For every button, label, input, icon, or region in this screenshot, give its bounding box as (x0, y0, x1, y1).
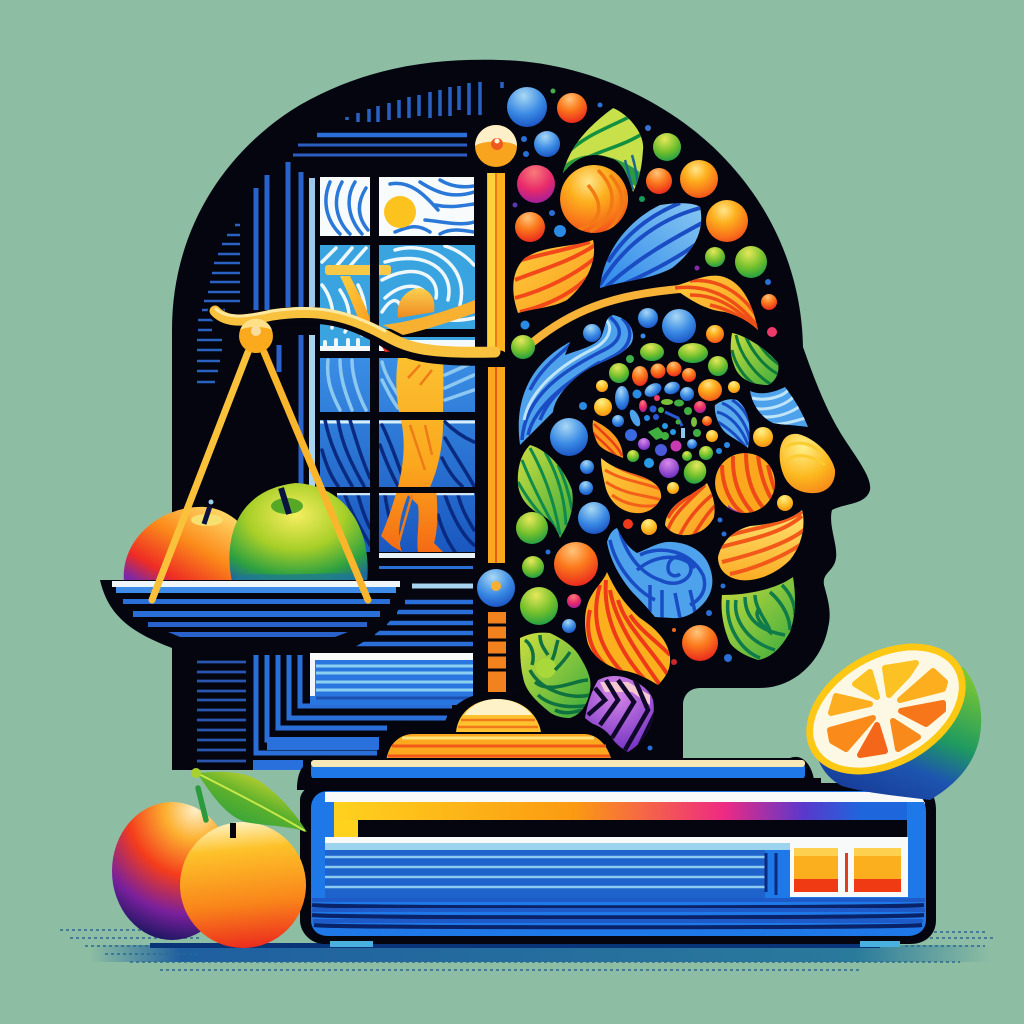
citrus half (783, 617, 989, 801)
big orange leaf lower (718, 510, 804, 580)
panel: window with swirling sky (320, 177, 475, 569)
leaves and fruit shapes inside head (505, 100, 835, 755)
figure other arm (383, 300, 475, 335)
purple shell (585, 676, 654, 752)
scale pan (100, 580, 410, 648)
citrus segments (830, 663, 945, 755)
scale post (474, 125, 518, 698)
window lower rows: deep blue waves (320, 358, 475, 552)
green swirl ball (520, 632, 590, 718)
citrus skin (817, 667, 981, 800)
window row one: white sky (320, 177, 475, 236)
blue leaf top (600, 203, 702, 288)
lower light block (310, 653, 473, 705)
blue swirl blob (607, 528, 712, 618)
citrus pith (793, 626, 979, 792)
middle knob (474, 566, 518, 610)
yellow fruit (780, 434, 835, 493)
spiral of dots (579, 343, 740, 494)
ground shadow (60, 930, 995, 970)
green leaf bottom right (722, 577, 795, 660)
scale strings (152, 352, 368, 600)
figure head (398, 288, 434, 318)
left dashes (197, 225, 240, 382)
scale base dome (376, 692, 622, 762)
orange leaf small (592, 420, 623, 458)
orange leaf left (513, 240, 594, 313)
top green leaf (563, 108, 644, 192)
sun (384, 196, 416, 228)
fruit: orange (180, 822, 306, 948)
orange leaf centre (665, 483, 715, 536)
figure in window (325, 265, 475, 552)
orange leaf centre left (601, 458, 662, 514)
left beam (215, 311, 495, 352)
panel: lower block line work (197, 586, 473, 770)
head silhouette (172, 60, 870, 790)
bowl apple: green (229, 483, 368, 582)
right of bowl stripes (412, 584, 473, 588)
window row two: cyan swirl (320, 245, 475, 351)
bowl apple: orange (124, 500, 260, 582)
concentric frames (256, 655, 452, 753)
blue swirl leaf (518, 315, 633, 445)
left beam shadow (215, 312, 500, 358)
green leaf right (730, 333, 778, 385)
panel: blue line work on left of head (197, 82, 502, 570)
orange flame (585, 572, 670, 685)
vertical bars (256, 162, 301, 310)
book gradient bar (334, 802, 907, 820)
book body (300, 783, 936, 944)
top knob (475, 125, 517, 167)
figure body (381, 358, 443, 552)
window frame bars (320, 177, 475, 552)
fruit: purple orange apple (112, 788, 232, 940)
top horizontal bars (317, 133, 467, 137)
window sill (379, 553, 475, 569)
citrus rim (783, 617, 989, 801)
orange ball top (560, 165, 628, 234)
blue leaf centre (714, 399, 750, 448)
right beam (533, 289, 680, 342)
orange ball right (715, 453, 775, 515)
blue leaf right (750, 387, 808, 427)
book stripes (312, 850, 925, 927)
scale pivot (239, 319, 273, 353)
book label (790, 843, 908, 897)
green leaf left (518, 445, 573, 538)
orange leaf on beam (672, 276, 758, 330)
colourful balls (507, 87, 793, 750)
book feet (330, 941, 900, 947)
fruit leaf (191, 768, 307, 832)
book base (297, 757, 936, 947)
tiny dots (512, 88, 771, 750)
scale beam (215, 289, 680, 358)
top dashes (347, 82, 502, 122)
book lid (297, 757, 821, 792)
lower left dashes (197, 662, 246, 761)
figure raised arm (325, 265, 391, 328)
